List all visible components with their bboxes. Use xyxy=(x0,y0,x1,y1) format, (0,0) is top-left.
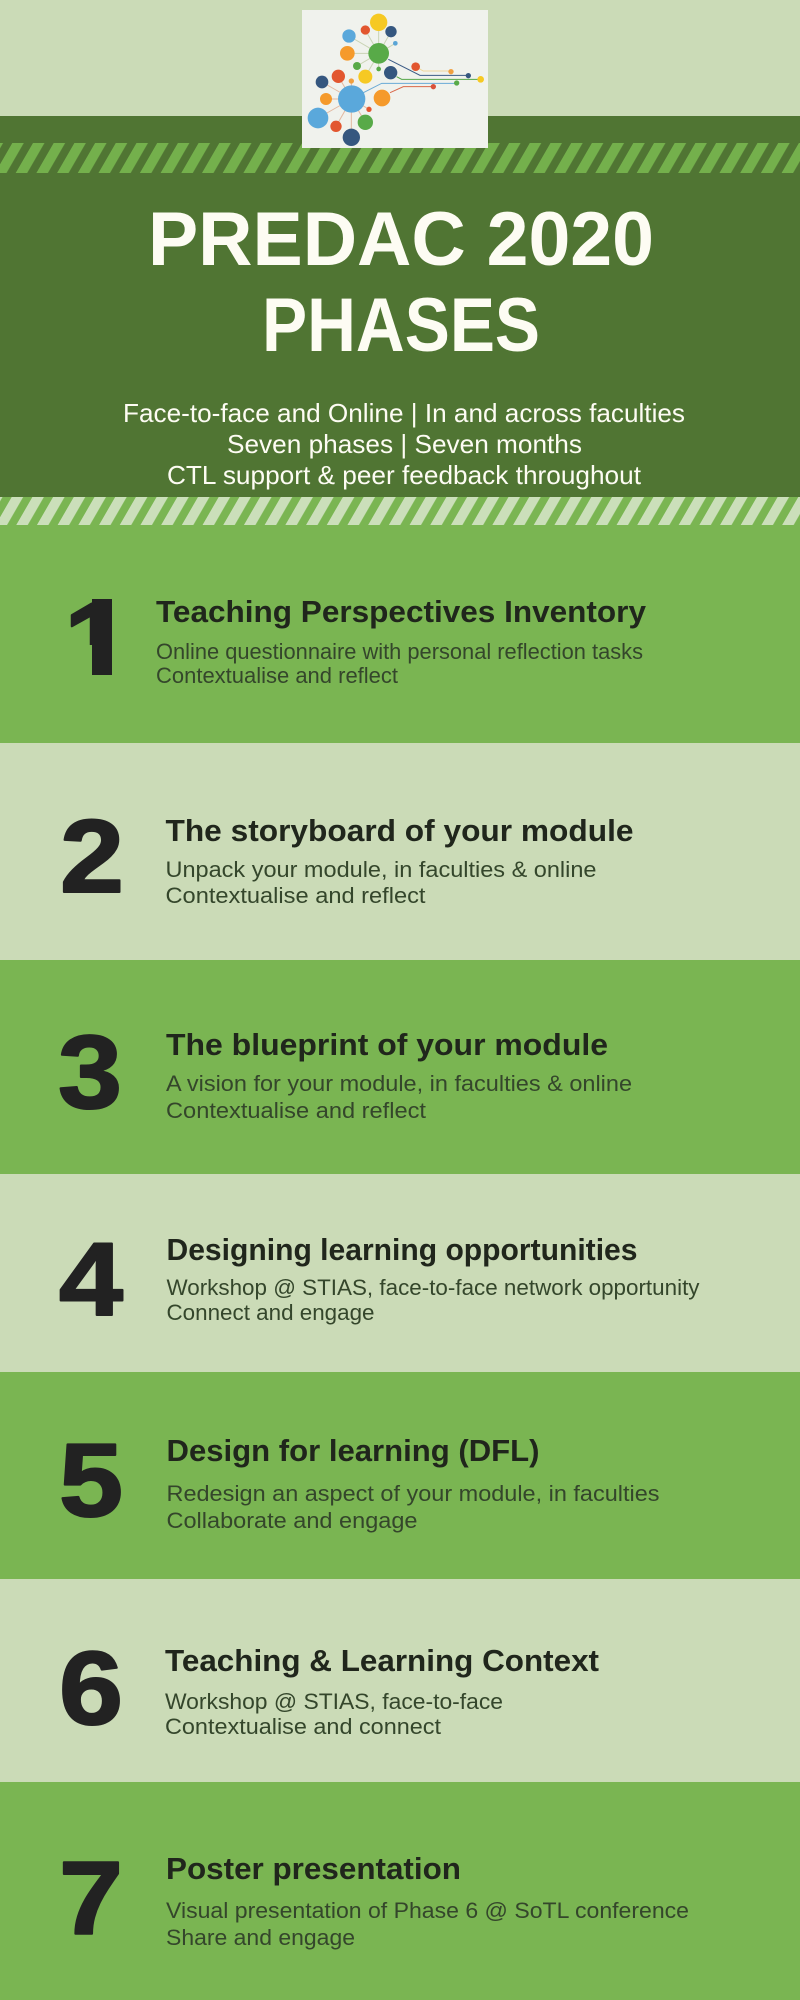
header subtitle xyxy=(123,398,685,490)
panel: phase 6: Teaching & Learning Context xyxy=(165,1643,599,1678)
logo: network graphic xyxy=(302,10,488,148)
panel: phase 4: 4 xyxy=(59,1222,123,1338)
panel: phase 7 xyxy=(0,1782,800,2000)
header subtitle: CTL support & peer feedback throughout xyxy=(167,460,642,490)
panel: phase 1: Teaching Perspectives Inventory xyxy=(156,594,647,629)
panel: phase 5 xyxy=(0,1372,800,1579)
panel: phase 7: 7 xyxy=(59,1841,123,1957)
header subtitle: Face-to-face and Online | In and across faculties xyxy=(123,398,685,428)
panel: phase 5: Design for learning (DFL) xyxy=(166,1433,540,1468)
header: dark green panel xyxy=(0,116,800,497)
header: top striped band xyxy=(0,143,800,173)
panel: phase 3: 3 xyxy=(58,1015,122,1131)
panel: phase 7: Poster presentation xyxy=(166,1851,461,1886)
panel: phase 1: Online questionnaire with personal reflection tasks xyxy=(156,639,643,664)
panel: phase 3: A vision for your module, in faculties & online xyxy=(166,1071,632,1096)
panel: phase 1: Contextualise and reflect xyxy=(156,663,398,688)
header: top light strip xyxy=(0,0,800,116)
panel: phase 1: 1 xyxy=(64,582,128,698)
panel: phase 4: Designing learning opportunities xyxy=(166,1232,638,1267)
panel: phase 6 xyxy=(0,1579,800,1782)
panel: phase 1 xyxy=(0,525,800,743)
title xyxy=(148,197,654,368)
panel: phase 2: 2 xyxy=(60,799,124,915)
header subtitle: Seven phases | Seven months xyxy=(227,429,582,459)
panel: phase 2 xyxy=(0,743,800,960)
panel: phase 4: Workshop @ STIAS, face-to-face network opportunity xyxy=(166,1275,700,1300)
panel: phase 7: Visual presentation of Phase 6 @ SoTL conference xyxy=(166,1898,689,1923)
panel: phase 5: Redesign an aspect of your module, in faculties xyxy=(166,1481,660,1506)
panel: phase 5: Collaborate and engage xyxy=(166,1508,418,1533)
title: PREDAC 2020 xyxy=(148,197,654,282)
panel: phase 4 xyxy=(0,1174,800,1372)
panel: phase 6: Contextualise and connect xyxy=(165,1714,441,1739)
panel: phase 2: The storyboard of your module xyxy=(166,813,634,848)
panel: phase 6: Workshop @ STIAS, face-to-face xyxy=(165,1689,503,1714)
panel: phase 6: 6 xyxy=(59,1631,123,1747)
panel: phase 3: Contextualise and reflect xyxy=(166,1098,426,1123)
panel: phase 4: Connect and engage xyxy=(166,1300,374,1325)
panel: phase 7: Share and engage xyxy=(166,1925,355,1950)
title: PHASES xyxy=(262,283,540,368)
panel: phase 2: Unpack your module, in faculties & online xyxy=(166,857,596,882)
panel: phase 3 xyxy=(0,960,800,1174)
header: bottom striped band xyxy=(0,497,800,525)
panel: phase 3: The blueprint of your module xyxy=(166,1027,608,1062)
panel: phase 5: 5 xyxy=(59,1423,123,1539)
panel: phase 2: Contextualise and reflect xyxy=(166,883,426,908)
